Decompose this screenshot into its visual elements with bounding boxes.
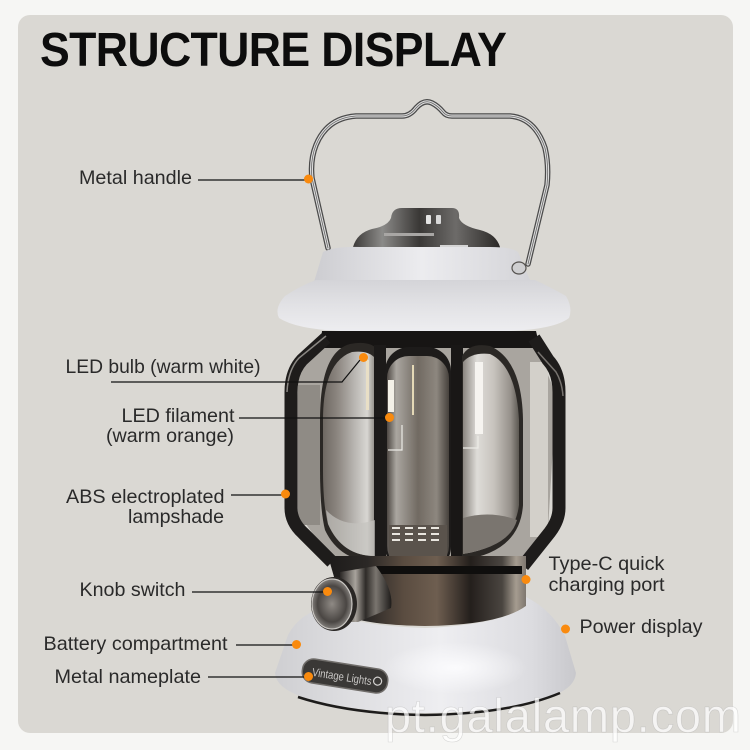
knob switch <box>311 566 391 631</box>
lantern collar <box>328 556 526 626</box>
label: Type-C port: charging port <box>548 574 665 596</box>
label: LED filament <box>106 405 394 447</box>
label: LED bulb: LED bulb (warm white) <box>66 356 260 378</box>
label: battery compartment: Battery compartment <box>44 633 228 655</box>
nameplate <box>301 657 389 695</box>
label: Type-C port <box>522 553 665 596</box>
label: ABS lampshade: ABS electroplated <box>66 486 224 508</box>
label: knob switch <box>80 579 332 601</box>
lantern top knob <box>353 208 500 251</box>
watermark: pt.galalamp.com <box>385 689 741 742</box>
lantern illustration <box>275 102 576 715</box>
label: ABS lampshade <box>66 486 290 528</box>
lantern handle <box>312 102 548 264</box>
label: metal handle <box>79 167 313 189</box>
label: LED filament: LED filament <box>122 405 235 427</box>
label: knob switch: Knob switch <box>80 579 186 601</box>
lantern base <box>275 597 576 715</box>
label: power display: Power display <box>580 616 703 638</box>
label: ABS lampshade: lampshade <box>128 506 224 528</box>
label: LED filament: (warm orange) <box>106 425 234 447</box>
label: Type-C port: Type-C quick <box>548 553 665 575</box>
label: metal nameplate: Metal nameplate <box>54 666 201 688</box>
label: metal nameplate <box>54 666 313 688</box>
lantern cap <box>277 247 570 331</box>
lantern cage and glass <box>287 331 563 571</box>
label: metal handle: Metal handle <box>79 167 192 189</box>
nameplate: Vintage Lights <box>311 667 372 688</box>
label: LED bulb <box>66 353 368 382</box>
title: STRUCTURE DISPLAY <box>40 23 507 76</box>
